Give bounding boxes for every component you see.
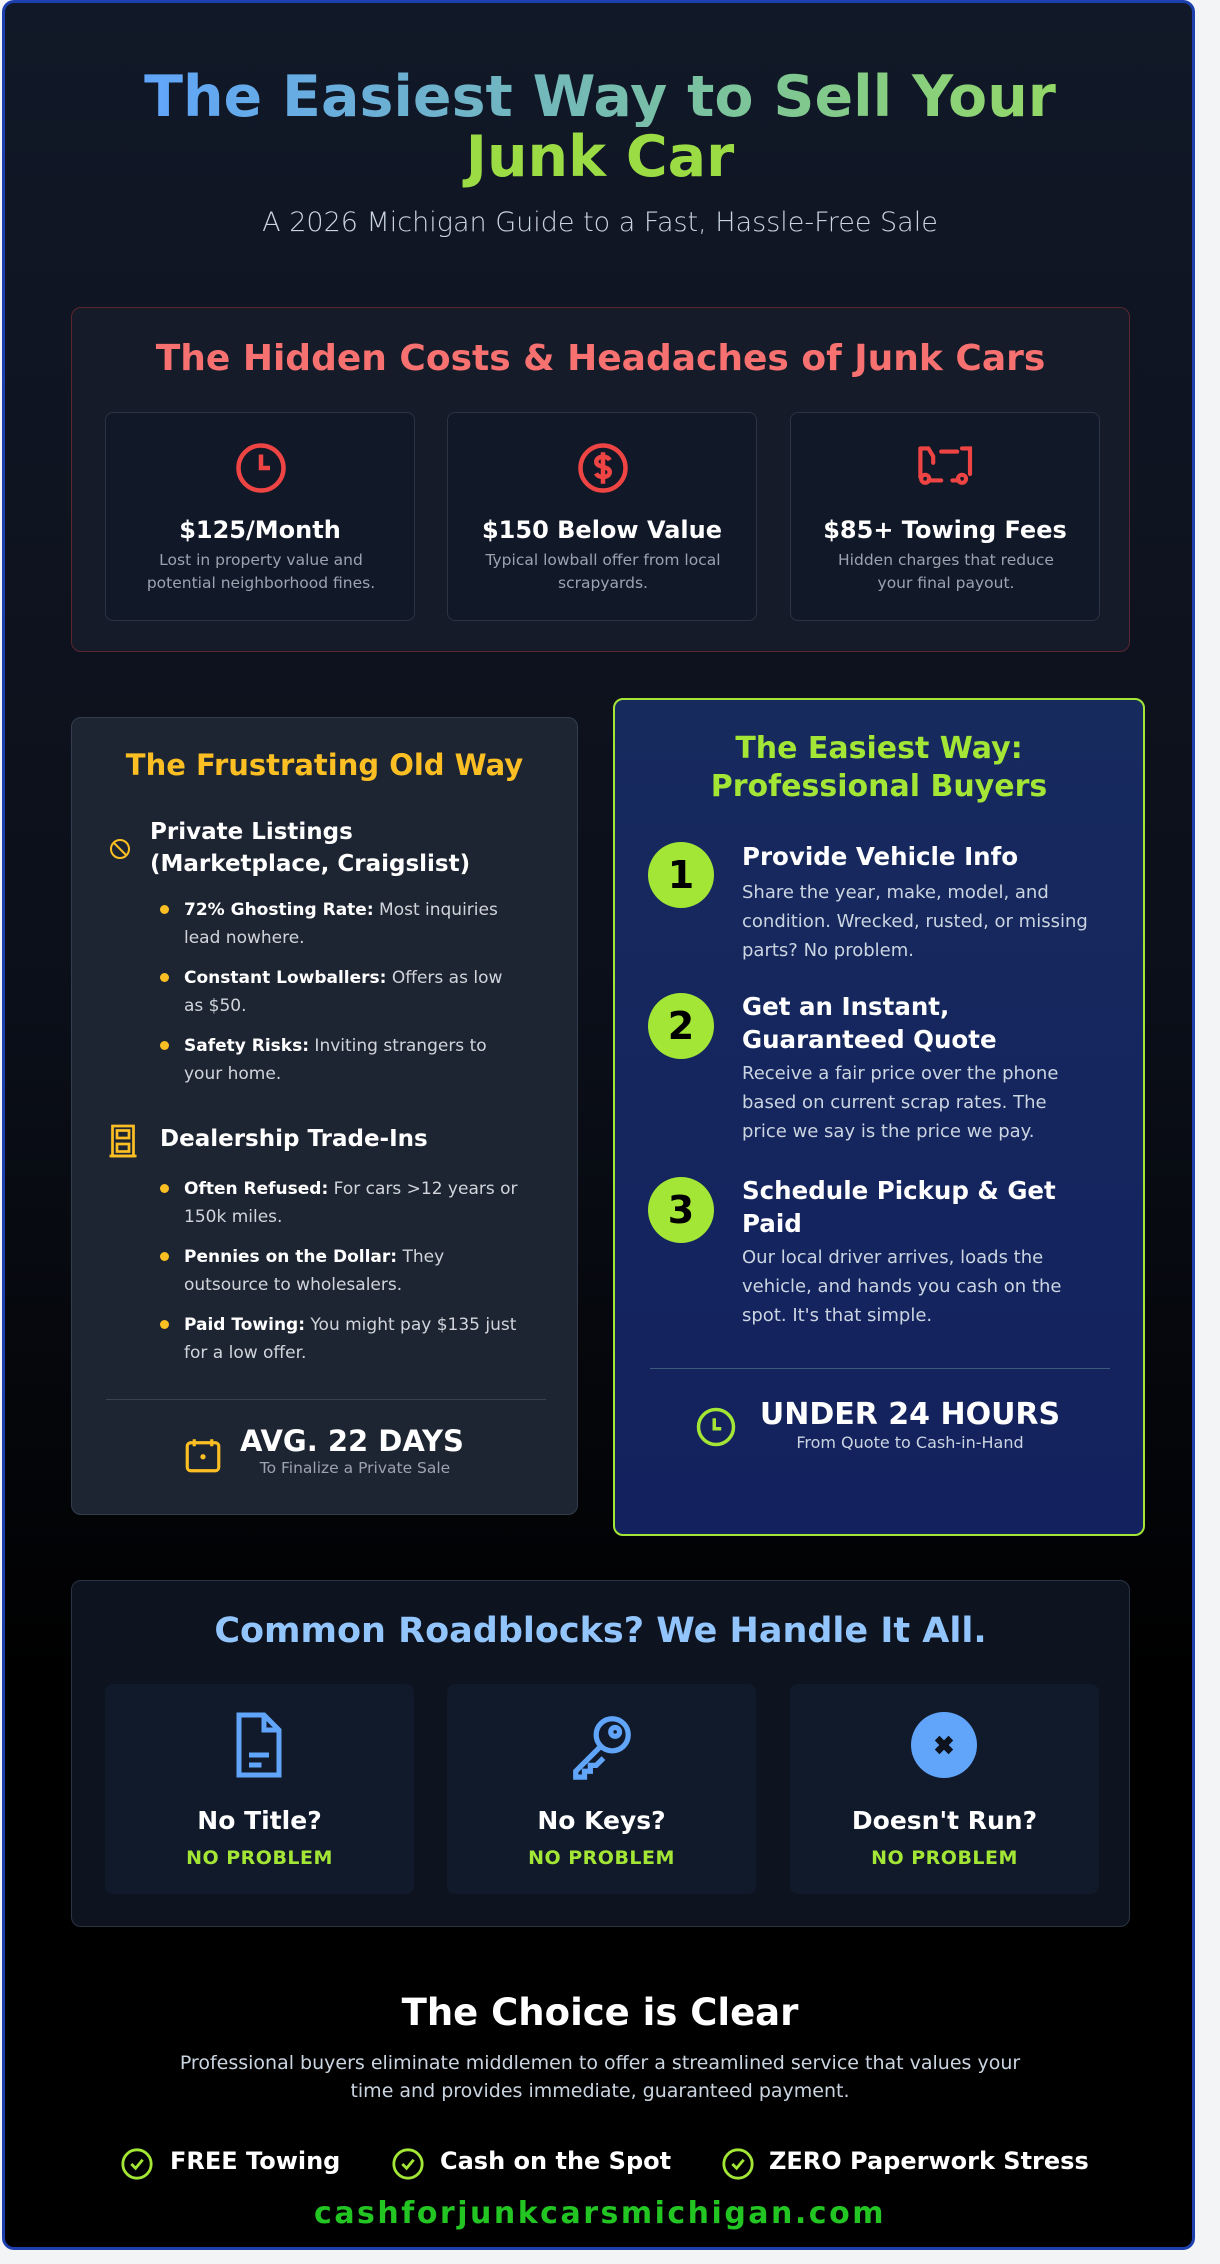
icon: document	[236, 1712, 282, 1778]
card: towing fees	[790, 412, 1100, 621]
bullet: 72% Ghosting Rate: Most inquiries lead nowhere.	[184, 900, 498, 948]
text: conclusion: Professional buyers eliminate middlemen to offer a streamlined service that values your	[180, 2052, 1020, 2074]
bullet	[184, 964, 522, 1020]
step 1: Provide Vehicle Info	[742, 842, 1018, 871]
step 2: 2	[668, 1004, 694, 1048]
icon: building	[110, 1124, 136, 1158]
card: doesn't run: Doesn't Run?	[852, 1806, 1037, 1835]
text: conclusion	[180, 2052, 1020, 2102]
bullet: Paid Towing: You might pay $135 just for a low offer.	[184, 1315, 516, 1363]
heading: easiest way	[711, 731, 1047, 804]
subheading: private listings: Private Listings	[150, 819, 353, 845]
card: below value: Typical lowball offer from local scrapyards.	[485, 551, 721, 592]
step 2: Receive a fair price over the phone based on current scrap rates. The price we say is the price we pay.	[742, 1063, 1058, 1142]
icon: clock	[696, 1408, 736, 1446]
stat: avg days: AVG. 22 DAYS	[240, 1424, 464, 1458]
icon: ban	[110, 839, 130, 859]
icon: x circle	[911, 1712, 977, 1778]
step 2	[648, 992, 1058, 1142]
subheading: private listings: (Marketplace, Craigslist)	[150, 851, 470, 877]
heading: easiest way: Professional Buyers	[711, 769, 1047, 804]
stat: under 24 hours: From Quote to Cash-in-Hand	[796, 1433, 1024, 1452]
panel: easiest way	[613, 698, 1145, 1536]
text: conclusion: time and provides immediate, guaranteed payment.	[350, 2080, 850, 2102]
card: towing fees: $85+ Towing Fees	[823, 516, 1067, 544]
icon: truck	[918, 446, 972, 485]
bullet: Pennies on the Dollar: They	[184, 1247, 444, 1267]
card: monthly cost: $125/Month	[179, 516, 341, 544]
card: no keys	[447, 1684, 756, 1894]
card: no title: NO PROBLEM	[186, 1847, 333, 1869]
stat: avg days	[240, 1424, 464, 1477]
card: below value	[447, 412, 757, 621]
card: no title	[105, 1684, 414, 1894]
panel: old way	[71, 717, 578, 1515]
title	[144, 64, 1056, 190]
subheading: dealership: Dealership Trade-Ins	[160, 1126, 428, 1152]
card: no title: No Title?	[197, 1806, 322, 1835]
benefits row	[121, 2147, 1089, 2180]
icon: key	[573, 1716, 631, 1780]
card: no keys: No Keys?	[537, 1806, 666, 1835]
title: The Easiest Way to Sell Your	[144, 64, 1056, 130]
bullet: outsource to wholesalers.	[184, 1275, 402, 1295]
heading: choice is clear: The Choice is Clear	[402, 1991, 798, 2034]
panel: roadblocks	[71, 1580, 1130, 1927]
title: Junk Car	[466, 124, 734, 190]
card: towing fees: Hidden charges that reduce your final payout.	[838, 551, 1054, 592]
bullet	[184, 1032, 522, 1088]
benefit: free towing	[121, 2147, 340, 2180]
bullet: as $50.	[184, 996, 247, 1016]
card: doesn't run	[790, 1684, 1099, 1894]
bullet: Safety Risks: Inviting strangers to	[184, 1036, 487, 1056]
stat: under 24 hours	[760, 1397, 1060, 1452]
step 3: Paid	[742, 1209, 802, 1238]
heading: old way: The Frustrating Old Way	[126, 748, 523, 782]
step 3	[648, 1176, 1061, 1326]
card: monthly cost	[105, 412, 415, 621]
step 1: Share the year, make, model, and condition. Wrecked, rusted, or missing parts? No problem.	[742, 882, 1088, 961]
step 2: Guaranteed Quote	[742, 1025, 997, 1054]
card: below value: $150 Below Value	[482, 516, 722, 544]
heading: easiest way: The Easiest Way:	[735, 731, 1023, 766]
benefit: cash on spot: Cash on the Spot	[440, 2147, 671, 2175]
step 1	[648, 842, 1088, 961]
icon: clock	[236, 443, 286, 493]
card: no keys: NO PROBLEM	[528, 1847, 675, 1869]
step 3: Schedule Pickup & Get	[742, 1176, 1056, 1205]
card: monthly cost: Lost in property value and potential neighborhood fines.	[147, 551, 375, 592]
heading: roadblocks: Common Roadblocks? We Handle It All.	[214, 1611, 987, 1651]
step 3: 3	[668, 1188, 694, 1232]
stat: avg days: To Finalize a Private Sale	[260, 1459, 450, 1477]
step 3: Our local driver arrives, loads the vehicle, and hands you cash on the spot. It's that simple.	[742, 1247, 1061, 1326]
icon: calendar	[186, 1439, 220, 1472]
bullet: Often Refused: For cars >12 years or 150k miles.	[184, 1179, 518, 1227]
bullet: your home.	[184, 1064, 281, 1084]
benefit: zero paperwork: ZERO Paperwork Stress	[769, 2147, 1089, 2175]
card: doesn't run: NO PROBLEM	[871, 1847, 1018, 1869]
subheading: private listings	[150, 819, 470, 877]
benefit: free towing: FREE Towing	[170, 2147, 340, 2175]
bullet: Constant Lowballers: Offers as low	[184, 968, 502, 988]
step 2: Get an Instant,	[742, 992, 949, 1021]
stat: under 24 hours: UNDER 24 HOURS	[760, 1397, 1060, 1432]
heading: hidden costs: The Hidden Costs & Headaches of Junk Cars	[156, 338, 1045, 379]
subtitle: A 2026 Michigan Guide to a Fast, Hassle-Free Sale	[262, 207, 938, 238]
url: cashforjunkcarsmichigan.com	[314, 2196, 886, 2231]
icon: dollar	[578, 443, 628, 493]
panel: hidden costs	[71, 307, 1130, 652]
bullet	[184, 1243, 522, 1299]
step 1: 1	[668, 853, 694, 897]
